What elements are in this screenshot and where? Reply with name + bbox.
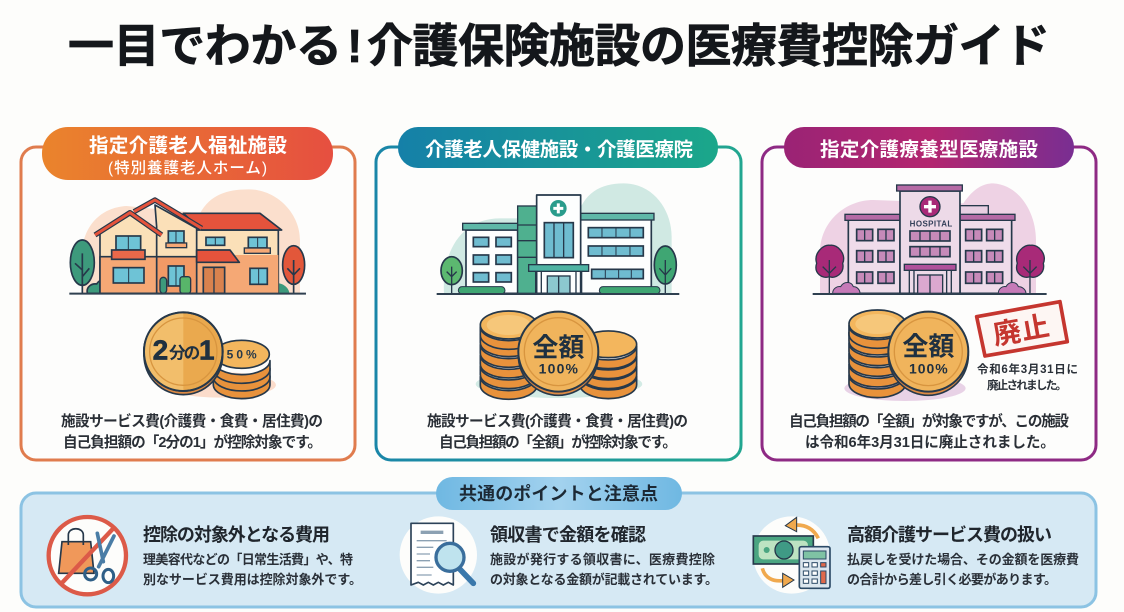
icon: coin 2分の1 50% <box>144 312 276 399</box>
description text: 施設サービス費(介護費・食費・居住費)の <box>427 412 688 430</box>
text: excluded costs: 控除の対象外となる費用 <box>143 525 330 545</box>
icon: coin 2分の1 50%: 分の <box>169 344 200 363</box>
title: 介護保険施設の医療費控除ガイド <box>367 20 1050 72</box>
icon: prohibited bag and scissors <box>49 517 126 594</box>
description text <box>61 412 323 451</box>
text: high-cost care service <box>847 524 1079 587</box>
heading pill: 共通のポイントと注意点 <box>459 483 658 504</box>
description text: 自己負担額の「全額」が対象ですが、この施設 <box>789 412 1069 430</box>
illustration: health facility building <box>437 183 679 294</box>
text: check receipt: の対象となる金額が記載されています。 <box>490 572 718 587</box>
text: check receipt: 施設が発行する領収書に、医療費控除 <box>490 552 715 567</box>
text: excluded costs: 別なサービス費用は控除対象外です。 <box>143 572 362 587</box>
icon: receipt and magnifier <box>400 516 477 594</box>
heading pill <box>436 477 682 510</box>
icon: coins 全額 100%: 全額 <box>902 332 954 362</box>
title: 一目でわかる <box>68 20 342 72</box>
panel: 共通のポイントと注意点 <box>21 477 1096 607</box>
header pill <box>42 127 333 180</box>
description text: は令和6年3月31日に廃止されました。 <box>805 433 1055 451</box>
icon: coin 2分の1 50%: 1 <box>199 335 215 366</box>
illustration: hospital: HOSPITAL <box>910 219 952 228</box>
text: check receipt <box>490 524 718 587</box>
panel: 介護老人保健施設・介護医療院 <box>376 127 741 460</box>
text: high-cost care service: 払戻しを受けた場合、その金額を医療費 <box>847 552 1079 567</box>
illustration: house <box>69 189 306 294</box>
stamp: 廃止: 廃止 <box>991 310 1052 351</box>
icon: coins 全額 100%: 全額 <box>532 333 584 363</box>
title <box>68 20 1050 72</box>
text: excluded costs <box>143 525 362 587</box>
header pill <box>784 127 1074 168</box>
panel: 指定介護療養型医療施設 <box>762 127 1096 460</box>
header pill <box>398 127 718 168</box>
panel frame <box>376 147 741 460</box>
text: high-cost care service: の合計から差し引く必要があります。 <box>847 572 1057 587</box>
header pill: 介護老人保健施設・介護医療院 <box>425 139 693 161</box>
icon: coin 2分の1 50%: 2 <box>153 335 168 366</box>
stamp: 廃止 <box>977 302 1067 356</box>
title: ! <box>347 20 362 72</box>
icon: coins 全額 100% <box>476 311 642 399</box>
header pill: 指定介護療養型医療施設 <box>820 139 1038 161</box>
note: abolished date <box>977 362 1078 392</box>
header pill: 指定介護老人福祉施設 <box>89 135 287 157</box>
icon: money, calculator and arrows <box>753 516 830 594</box>
description text: 自己負担額の「2分の1」が控除対象です。 <box>63 433 322 451</box>
description text: 自己負担額の「全額」が控除対象です。 <box>439 433 677 451</box>
text: excluded costs: 理美容代などの「日常生活費」や、特 <box>143 552 353 567</box>
panel: 指定介護老人福祉施設 <box>21 127 355 460</box>
panel frame <box>21 147 355 460</box>
icon: coin 2分の1 50%: 50% <box>227 348 257 362</box>
icon: coins 全額 100%: 100% <box>539 360 579 376</box>
panel frame <box>762 147 1096 460</box>
description text <box>427 412 688 451</box>
icon: coins 全額 100% <box>844 310 968 401</box>
icon: coins 全額 100%: 100% <box>909 360 948 376</box>
panel background <box>21 493 1096 607</box>
description text <box>789 412 1069 451</box>
text: check receipt: 領収書で金額を確認 <box>490 524 646 545</box>
note: abolished date: 令和6年3月31日に <box>977 362 1078 376</box>
illustration: hospital <box>813 183 1047 294</box>
header pill: (特別養護老人ホーム) <box>108 159 267 177</box>
note: abolished date: 廃止されました。 <box>987 378 1067 392</box>
text: high-cost care service: 高額介護サービス費の扱い <box>847 524 1052 545</box>
description text: 施設サービス費(介護費・食費・居住費)の <box>61 412 323 430</box>
